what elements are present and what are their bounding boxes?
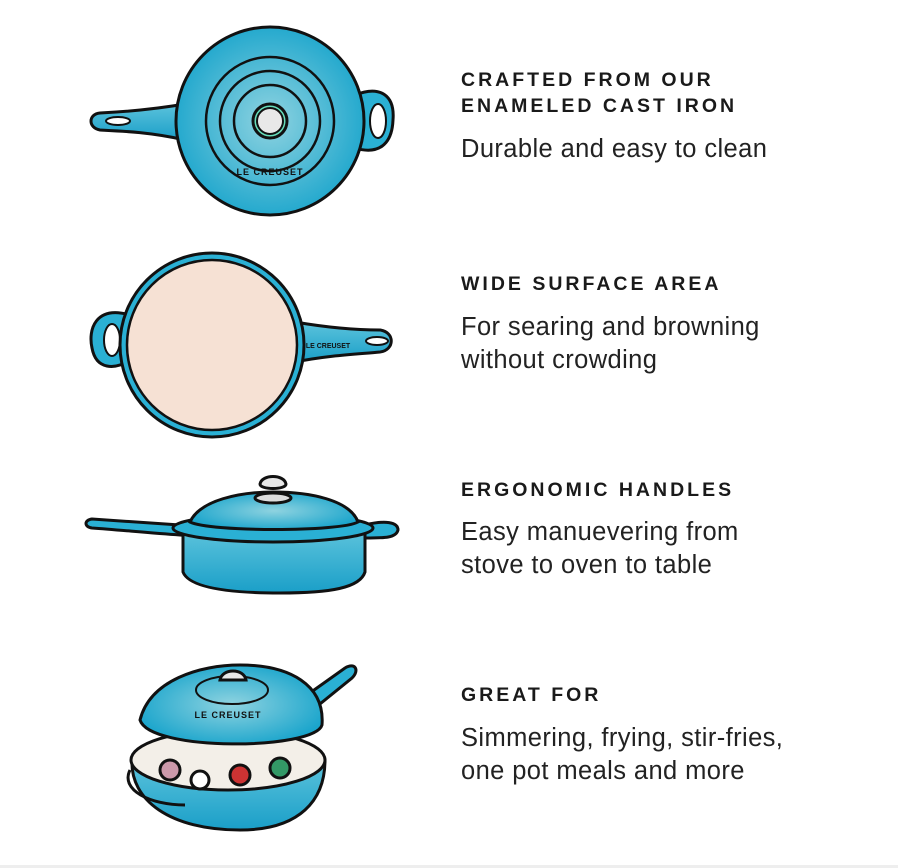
heading 3: ERGONOMIC HANDLES bbox=[461, 479, 734, 501]
icon: pan top view lid bbox=[91, 27, 393, 215]
heading 1 bbox=[461, 69, 737, 117]
heading 1: ENAMELED CAST IRON bbox=[461, 95, 737, 117]
icon: pan side view bbox=[86, 476, 398, 593]
body 4: one pot meals and more bbox=[461, 757, 745, 785]
logo text 4: LE CREUSET bbox=[194, 710, 262, 720]
icon: braiser with food bbox=[128, 665, 356, 830]
body 2: For searing and browning bbox=[461, 313, 760, 341]
body 3 bbox=[461, 518, 739, 579]
body 4 bbox=[461, 724, 783, 785]
icon: pan interior bbox=[91, 253, 391, 437]
body 2: without crowding bbox=[461, 346, 657, 374]
heading 4: GREAT FOR bbox=[461, 684, 601, 706]
heading 2: WIDE SURFACE AREA bbox=[461, 273, 721, 295]
body 3: stove to oven to table bbox=[461, 551, 712, 579]
body 4: Simmering, frying, stir-fries, bbox=[461, 724, 783, 752]
heading 1: CRAFTED FROM OUR bbox=[461, 69, 714, 91]
logo text 1: LE CREUSET bbox=[236, 167, 304, 177]
logo text 2: LE CREUSET bbox=[306, 343, 351, 350]
body 1: Durable and easy to clean bbox=[461, 135, 767, 163]
body 2 bbox=[461, 313, 760, 374]
body 3: Easy manuevering from bbox=[461, 518, 739, 546]
